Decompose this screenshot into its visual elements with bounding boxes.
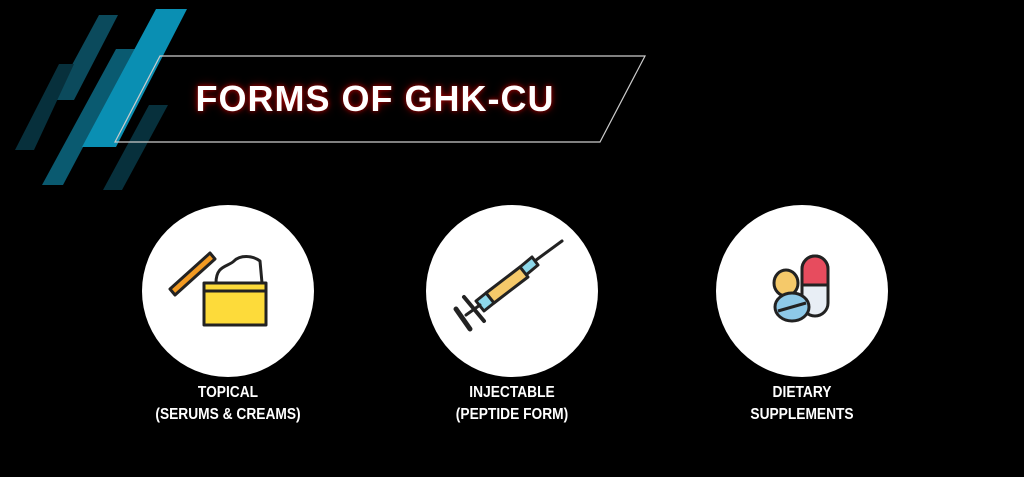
circle: supplements <box>716 205 888 377</box>
label: supplements <box>750 384 854 423</box>
icon: pills <box>774 256 828 321</box>
circle: injectable <box>426 205 598 377</box>
circle: topical <box>142 205 314 377</box>
label: topical: (SERUMS & CREAMS) <box>155 406 301 423</box>
icon: syringe <box>456 241 562 329</box>
label: topical <box>155 384 301 423</box>
title frame <box>115 56 645 142</box>
label: injectable: INJECTABLE <box>469 384 555 401</box>
icon: cream jar <box>170 253 266 325</box>
title: FORMS OF GHK-CU <box>196 78 554 119</box>
label: supplements: DIETARY <box>773 384 831 401</box>
label: injectable <box>456 384 568 423</box>
label: topical: TOPICAL <box>198 384 258 401</box>
label: supplements: SUPPLEMENTS <box>750 406 854 423</box>
label: injectable: (PEPTIDE FORM) <box>456 406 568 423</box>
